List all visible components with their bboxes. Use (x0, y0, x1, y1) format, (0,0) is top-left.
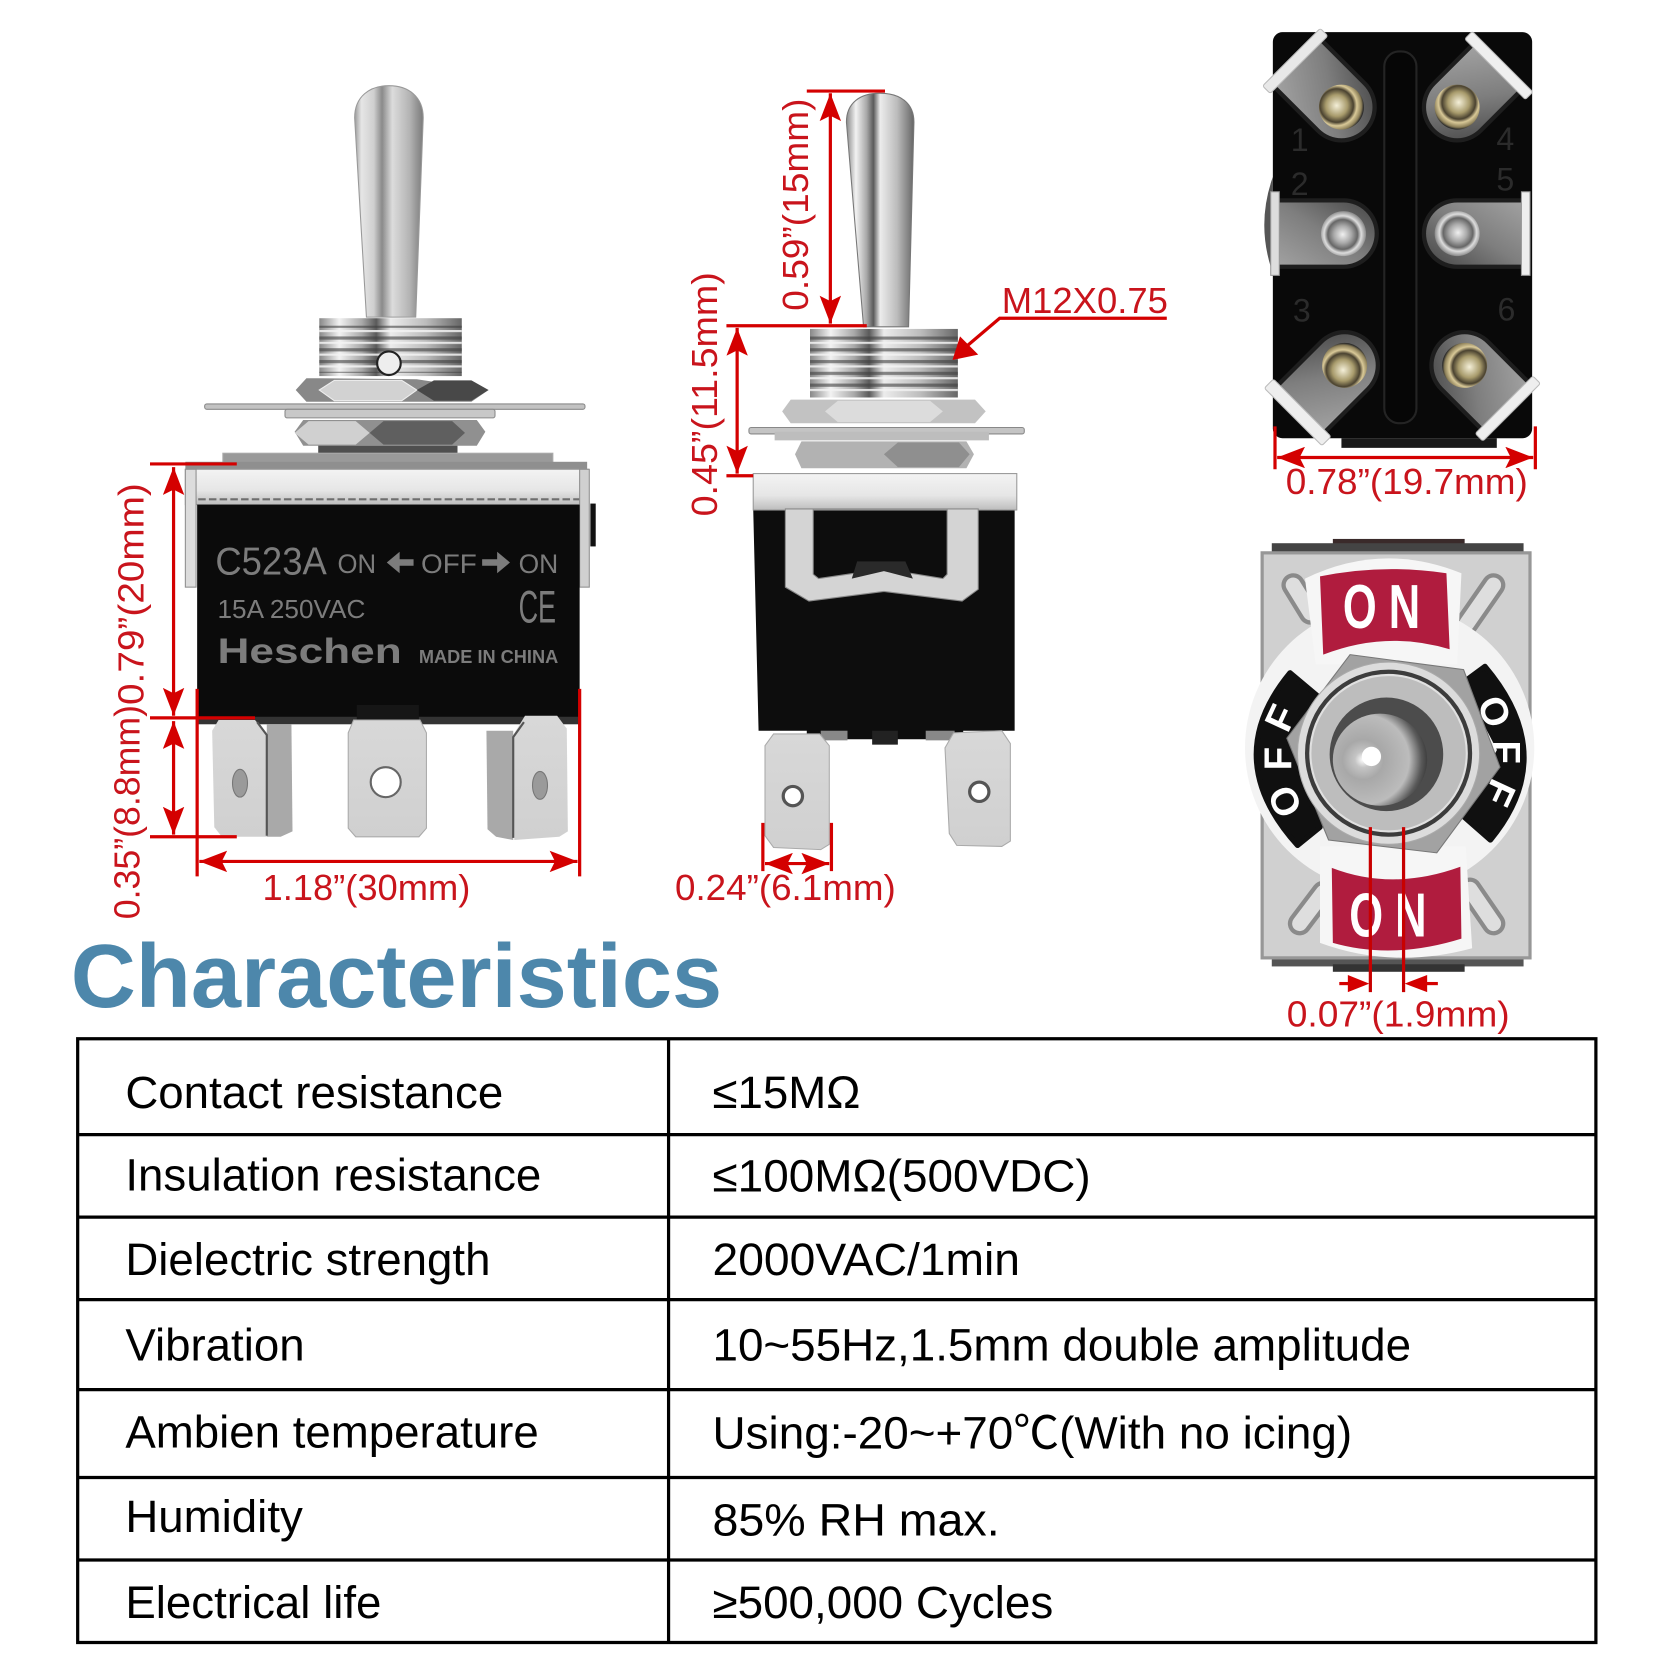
terminal 1 (1263, 28, 1395, 161)
panel: side view switch with dimensions (106, 86, 596, 919)
row: contact resistance: Contact resistance (125, 1067, 503, 1118)
body markings: ON (519, 549, 558, 579)
OFF label right: O (1468, 690, 1519, 733)
bushing and lever end (1298, 662, 1480, 844)
body markings: 15A 250VAC (218, 596, 365, 624)
body markings: Heschen (218, 632, 402, 671)
row: humidity: Humidity (125, 1491, 303, 1542)
body markings: MADE IN CHINA (419, 647, 558, 667)
switch body (753, 509, 1015, 739)
icon: toggle lever (846, 93, 914, 327)
terminals (212, 705, 568, 840)
body markings: OFF (421, 549, 477, 579)
callout: thread size: M12X0.75 (1002, 280, 1168, 321)
plate slots (1293, 585, 1494, 924)
panel: front label view (1245, 539, 1534, 1034)
row: contact resistance: ≤15MΩ (712, 1067, 860, 1118)
terminal numbers (1291, 121, 1515, 328)
row: electrical life: Electrical life (125, 1577, 381, 1628)
ON label bottom (1332, 867, 1461, 950)
row: electrical life (125, 1577, 1053, 1628)
row: ambient temperature (125, 1407, 1352, 1459)
dimension label: terminal width: 0.24”(6.1mm) (675, 867, 896, 908)
OFF label left (1256, 673, 1320, 845)
row: humidity: 85% RH max. (712, 1494, 1000, 1545)
body markings: CE (519, 582, 556, 633)
hex nuts and mounting plate (749, 400, 1024, 468)
callout: thread size (952, 280, 1168, 360)
row: insulation resistance: ≤100MΩ(500VDC) (712, 1150, 1091, 1201)
ON label top: ON (1343, 572, 1432, 642)
panel: rear terminal view (1263, 28, 1540, 502)
body markings: ON (338, 549, 376, 579)
row: insulation resistance: Insulation resistance (125, 1149, 541, 1200)
body markings: C523A (215, 540, 327, 583)
terminal numbers: 3 (1293, 292, 1311, 328)
dimension label: lever height: 0.59”(15mm) (775, 99, 816, 311)
row: electrical life: ≥500,000 Cycles (712, 1577, 1053, 1628)
dimension: rear width (1275, 426, 1535, 502)
row: contact resistance (125, 1067, 860, 1118)
terminal numbers: 1 (1291, 122, 1309, 158)
threaded collar (319, 318, 462, 376)
OFF label left: F (1258, 747, 1301, 770)
row: dielectric strength: Dielectric strength (125, 1234, 490, 1285)
housing edges (1272, 539, 1524, 972)
threaded collar (810, 329, 958, 398)
terminal numbers: 6 (1497, 291, 1515, 327)
dimension label: width: 1.18”(30mm) (262, 867, 470, 908)
dimension lines: end view (726, 91, 885, 871)
OFF label right: F (1484, 740, 1527, 764)
terminal 6 (1411, 312, 1540, 441)
dimension label: bushing height: 0.45”(11.5mm) (684, 272, 725, 516)
terminal numbers: 5 (1496, 162, 1514, 198)
panel: end view switch with dimensions (675, 91, 1168, 908)
terminal 4 (1402, 31, 1533, 162)
icon: toggle lever (355, 86, 423, 317)
OFF label left: F (1257, 699, 1306, 738)
metal bracket (753, 474, 1017, 601)
terminal numbers: 2 (1291, 166, 1309, 202)
row: insulation resistance (125, 1149, 1091, 1201)
center ridge (1384, 51, 1416, 423)
dimension: lever width (1287, 827, 1510, 1034)
heading: Characteristics: Characteristics (71, 927, 722, 1027)
hex nuts and mounting plate (205, 378, 585, 454)
dial label (1245, 558, 1534, 958)
OFF label right (1464, 666, 1527, 840)
switch body (197, 505, 580, 724)
terminal 5 (1422, 192, 1530, 275)
metal plate (1262, 553, 1530, 958)
row: vibration: Vibration (125, 1320, 305, 1371)
row: ambient temperature: Ambien temperature (125, 1407, 539, 1458)
terminals (765, 731, 1010, 850)
dimension: lever width: 0.07”(1.9mm) (1287, 993, 1510, 1034)
row: vibration: 10~55Hz,1.5mm double amplitude (712, 1320, 1411, 1371)
row: humidity (125, 1491, 1000, 1545)
dimension label: height: 0.79”(20mm) (111, 483, 152, 705)
ON label top (1320, 569, 1450, 655)
terminal 3 (1264, 312, 1398, 446)
terminal numbers: 4 (1496, 121, 1514, 157)
dimension label: terminal length: 0.35”(8.8mm) (106, 705, 147, 919)
row: dielectric strength (125, 1234, 1020, 1285)
terminal 2 (1271, 192, 1379, 275)
row: ambient temperature: Using:-20~+70℃(With no icing) (712, 1408, 1352, 1459)
row: dielectric strength: 2000VAC/1min (712, 1234, 1020, 1285)
OFF label left: O (1260, 778, 1311, 824)
ON label bottom: ON (1349, 881, 1439, 950)
switch rear housing (1273, 32, 1532, 438)
body markings (215, 540, 558, 671)
table grid (78, 1039, 1596, 1642)
row: vibration (125, 1320, 1411, 1371)
metal bracket (185, 453, 596, 587)
dimension: rear width: 0.78”(19.7mm) (1286, 461, 1528, 502)
OFF label right: F (1475, 773, 1524, 812)
table: characteristics (78, 1039, 1596, 1642)
hex nut (1287, 655, 1500, 853)
dimension lines: left view (150, 464, 580, 876)
